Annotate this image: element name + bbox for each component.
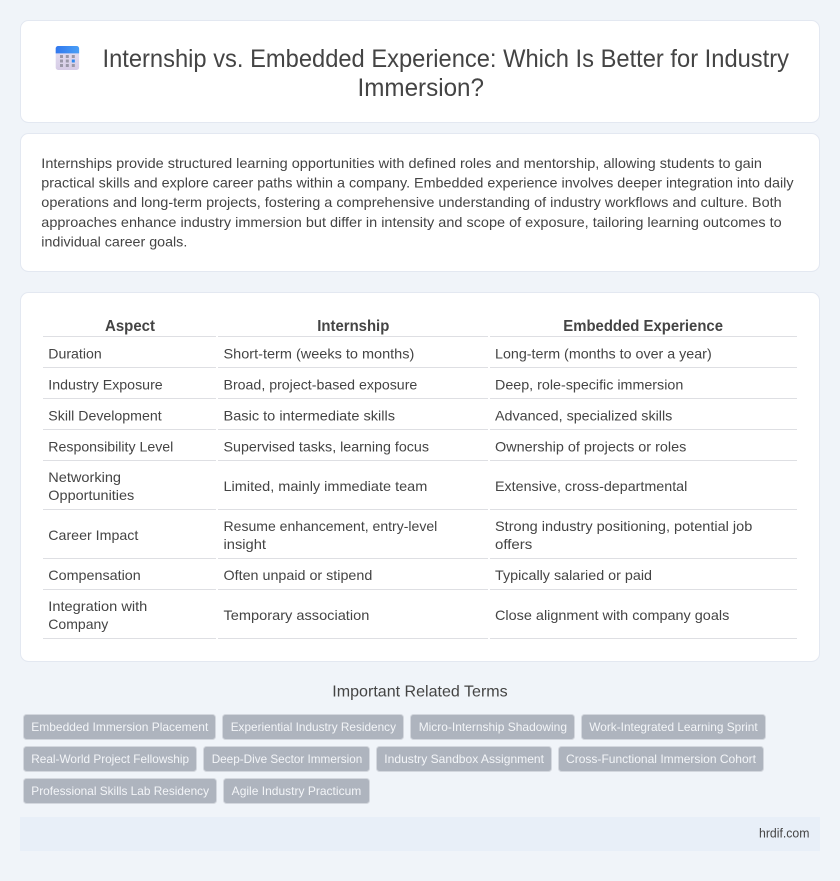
tag: deep-dive sector immersion [204, 746, 370, 772]
row: industry exposure [48, 376, 683, 392]
text block: introduction paragraph: practical skills and explore career paths within a company. Embedded experience involves deeper integration into daily [41, 175, 794, 191]
tag: embedded immersion placement: Embedded Immersion Placement [31, 720, 209, 734]
title: Internship vs. Embedded Experience: Which Is Better for Industry [102, 45, 789, 73]
tag: real-world project fellowship [24, 746, 196, 772]
row: industry exposure: Broad, project-based exposure [224, 376, 418, 392]
tag: experiential industry residency [222, 714, 404, 740]
title: Immersion? [358, 74, 484, 102]
tag: micro-internship shadowing [410, 714, 574, 740]
row: responsibility level: Ownership of projects or roles [495, 438, 686, 454]
tag: professional skills lab residency: Professional Skills Lab Residency [31, 784, 209, 798]
row: duration: Long-term (months to over a year) [495, 346, 712, 362]
row: career impact: insight [224, 536, 266, 552]
row: duration [48, 346, 712, 362]
row: career impact: Strong industry positioning, potential job [495, 518, 753, 534]
tag: agile industry practicum: Agile Industry Practicum [232, 784, 361, 798]
row: career impact: Career Impact [48, 527, 138, 543]
tag: micro-internship shadowing: Micro-Internship Shadowing [419, 720, 567, 734]
row: networking opportunities: Opportunities [48, 487, 134, 503]
row: networking opportunities: Extensive, cross-departmental [495, 478, 687, 494]
text block: introduction paragraph: approaches enhance industry immersion but differ in intensity and scope of exposure, tailoring learning outcomes to [41, 214, 782, 230]
tag: experiential industry residency: Experiential Industry Residency [231, 720, 396, 734]
row: career impact: offers [495, 536, 532, 552]
text block: introduction paragraph: individual career goals. [41, 233, 187, 249]
row: compensation: Compensation [48, 567, 141, 583]
table header: Embedded Experience [563, 318, 723, 335]
row: career impact [48, 518, 753, 552]
tag: agile industry practicum [224, 778, 370, 804]
row: duration: Duration [48, 346, 102, 362]
row: industry exposure: Industry Exposure [48, 376, 163, 392]
row: responsibility level [48, 438, 686, 454]
row: compensation [48, 567, 652, 583]
row: compensation: Typically salaried or paid [495, 567, 652, 583]
title [102, 45, 789, 102]
table header [105, 318, 723, 335]
row: duration: Short-term (weeks to months) [224, 346, 414, 362]
text block: introduction paragraph: operations and long-term projects, fostering a comprehensive understanding of industry workflows and culture. Both [41, 194, 782, 210]
row: integration with company: Close alignment with company goals [495, 607, 729, 623]
row: integration with company: Integration with [48, 598, 147, 614]
panel: related term tags [24, 714, 766, 804]
tag: work-integrated learning sprint: Work-Integrated Learning Sprint [589, 720, 758, 734]
row: compensation: Often unpaid or stipend [224, 567, 372, 583]
footer: hrdif.com [759, 826, 810, 841]
row: skill development: Basic to intermediate skills [224, 408, 395, 424]
tag: professional skills lab residency [24, 778, 216, 804]
panel: title card [20, 20, 820, 122]
text block: introduction paragraph [41, 155, 794, 249]
icon: calendar [56, 46, 79, 70]
row: networking opportunities: Networking [48, 469, 121, 485]
row: networking opportunities [48, 469, 687, 503]
tag: deep-dive sector immersion: Deep-Dive Sector Immersion [212, 752, 362, 766]
row: skill development: Advanced, specialized skills [495, 408, 672, 424]
tag: work-integrated learning sprint [582, 714, 766, 740]
tag: cross-functional immersion cohort: Cross-Functional Immersion Cohort [566, 752, 757, 766]
row: integration with company [48, 598, 729, 632]
row: industry exposure: Deep, role-specific immersion [495, 376, 683, 392]
table header: Aspect [105, 318, 156, 335]
tag: industry sandbox assignment [376, 746, 552, 772]
row: integration with company: Temporary association [224, 607, 369, 623]
table header: Internship [317, 318, 390, 335]
tag: embedded immersion placement [24, 714, 216, 740]
text block: introduction paragraph: Internships provide structured learning opportunities with defined roles and mentorship, allowing students to gain [41, 155, 762, 171]
footer [20, 817, 820, 851]
row: networking opportunities: Limited, mainly immediate team [224, 478, 427, 494]
heading: important related terms: Important Related Terms [332, 684, 508, 701]
row: skill development [48, 408, 672, 424]
panel: introduction [20, 134, 820, 272]
row: responsibility level: Supervised tasks, learning focus [224, 438, 429, 454]
tag: cross-functional immersion cohort [558, 746, 764, 772]
row: responsibility level: Responsibility Level [48, 438, 173, 454]
row: integration with company: Company [48, 616, 108, 632]
tag: real-world project fellowship: Real-World Project Fellowship [31, 752, 189, 766]
row: career impact: Resume enhancement, entry-level [224, 518, 437, 534]
panel: comparison table [20, 292, 820, 662]
tag: industry sandbox assignment: Industry Sandbox Assignment [384, 752, 545, 766]
row: skill development: Skill Development [48, 408, 162, 424]
